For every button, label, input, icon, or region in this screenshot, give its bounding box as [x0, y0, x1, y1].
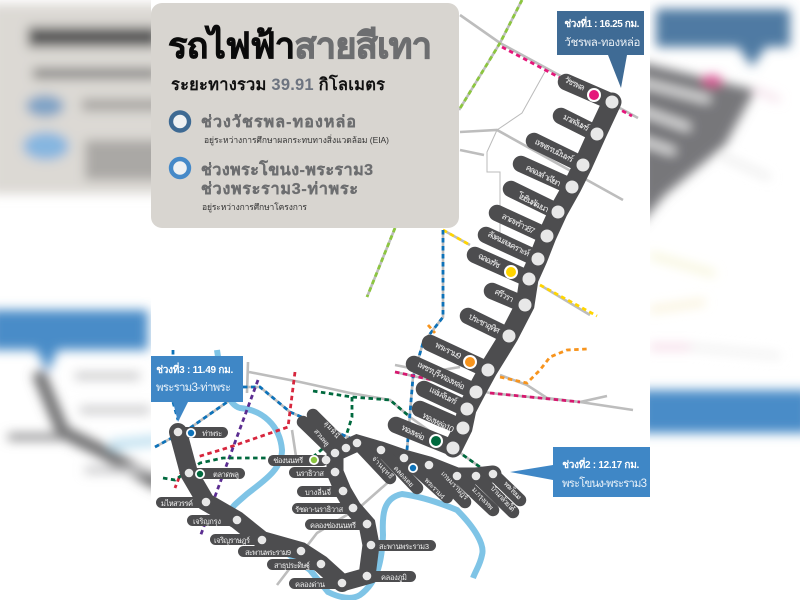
callout: section 1: ช่วงที่1 : 16.25 กม. — [564, 16, 640, 30]
callout: section 3: พระราม3-ท่าพระ — [156, 382, 231, 394]
line section 2: Phra Khanong to Rama 3: เกษมราษฎร์ — [439, 470, 470, 502]
line section 2: Phra Khanong to Rama 3: สวนพลู — [312, 428, 330, 448]
callout: section 3 — [151, 356, 243, 422]
title: รถไฟฟ้าสายสีเทา — [168, 24, 432, 66]
legend: Phra Khanong-Rama 3-Tha Phra: ช่วงพระโขนง-พระราม3 — [201, 159, 373, 179]
line section 1: Watcharaphon to Thonglo: ทองหล่อ10 — [421, 410, 456, 435]
line section 1: Watcharaphon to Thonglo: ฉลองรัช — [476, 250, 503, 270]
line section 3: Rama 3 to Tha Phra: ท่าพระ — [202, 429, 222, 438]
line section 2: Phra Khanong to Rama 3: พระโขนง — [502, 479, 524, 501]
line section 1: Watcharaphon to Thonglo: คลองลำเจียก — [524, 162, 563, 188]
line section 1: Watcharaphon to Thonglo: พระราม9 — [434, 340, 463, 361]
line section 1: Watcharaphon to Thonglo: เพชรบุรี-ทองหล่อ — [415, 359, 467, 392]
total distance: ระยะทางรวม 39.91 กิโลเมตร — [171, 74, 385, 94]
line section 1: Watcharaphon to Thonglo: แจ่มจันทร์ — [428, 384, 459, 407]
line section 3: Rama 3 to Tha Phra: เจริญกรุง — [193, 517, 221, 526]
line section 2: Phra Khanong to Rama 3 — [303, 415, 524, 583]
line section 1: Watcharaphon to Thonglo — [396, 74, 618, 454]
callout: section 2 — [510, 447, 650, 497]
line section 2: Phra Khanong to Rama 3: พระราม4 — [423, 477, 446, 501]
line section 2: Phra Khanong to Rama 3: ม.กรุงเทพ — [470, 486, 494, 512]
legend: Phra Khanong-Rama 3-Tha Phra: อยู่ระหว่างการศึกษาโครงการ — [202, 202, 307, 213]
background transit lines — [155, 0, 638, 585]
line section 3: Rama 3 to Tha Phra: สะพานพระราม9 — [245, 548, 291, 557]
line section 3: Rama 3 to Tha Phra: บางลี่นจี่ — [305, 487, 331, 497]
line section 2: Phra Khanong to Rama 3: จ่านยุทธี — [370, 455, 395, 481]
callout: section 2: ช่วงที่2 : 12.17 กม. — [562, 457, 640, 471]
line section 2: Phra Khanong to Rama 3: คลองเตย — [392, 465, 415, 489]
legend: Phra Khanong-Rama 3-Tha Phra: ช่วงพระราม3-ท่าพระ — [201, 181, 358, 198]
blurred left backdrop — [0, 4, 165, 485]
line section 1: Watcharaphon to Thonglo: ทองหล่อ — [400, 422, 427, 442]
line section 3: Rama 3 to Tha Phra: ช่องนนทรี — [273, 456, 303, 465]
line section 1: Watcharaphon to Thonglo: ศรีวรา — [493, 286, 516, 304]
line section 2: Phra Khanong to Rama 3: บ้านกล้วยใต้ — [489, 484, 518, 514]
line section 1: Watcharaphon to Thonglo: วัชรพล — [563, 74, 587, 93]
callout: section 1: วัชรพล-ทองหล่อ — [564, 37, 640, 49]
line section 3: Rama 3 to Tha Phra: เจริญราษฎร์ — [214, 536, 250, 545]
line section 1: Watcharaphon to Thonglo: ประชาอุทิศ — [466, 311, 502, 337]
callout: section 2: พระโขนง-พระราม3 — [562, 476, 647, 490]
line section 2: Phra Khanong to Rama 3: ลุมพินี — [322, 419, 341, 440]
line section 3: Rama 3 to Tha Phra: คลองภูมิ — [381, 573, 407, 582]
line section 3: Rama 3 to Tha Phra: ตลาดพลู — [213, 470, 239, 479]
line section 3: Rama 3 to Tha Phra: รัชดา-นราธิวาส — [295, 505, 344, 514]
legend: Phra Khanong-Rama 3-Tha Phra — [171, 159, 373, 213]
panel: title and legend — [151, 3, 459, 228]
legend: Watcharaphon-Thonglo: อยู่ระหว่างการศึกษาผลกระทบทางสิ่งแวดล้อม (EIA) — [204, 134, 389, 146]
white centre backing — [151, 0, 650, 600]
rivers — [217, 350, 483, 598]
legend: Watcharaphon-Thonglo — [171, 112, 389, 146]
line section 1: Watcharaphon to Thonglo: ลาดพร้าว87 — [500, 211, 537, 236]
line section 3: Rama 3 to Tha Phra: นราธิวาส — [296, 469, 324, 478]
line section 1: Watcharaphon to Thonglo: มวลจันทร์ — [562, 112, 591, 133]
blurred right backdrop — [640, 9, 800, 433]
callout: section 3: ช่วงที่3 : 11.49 กม. — [156, 362, 233, 376]
line section 3: Rama 3 to Tha Phra: มไหสวรรค์ — [161, 499, 193, 508]
callout: section 1 — [557, 11, 644, 88]
line section 3: Rama 3 to Tha Phra: สาธุประดิษฐ์ — [274, 561, 310, 570]
line section 3: Rama 3 to Tha Phra: คลองช่องนนทรี — [310, 521, 356, 530]
line section 1: Watcharaphon to Thonglo: สังคมสงเคราะห์ — [486, 229, 532, 258]
line section 3: Rama 3 to Tha Phra — [156, 427, 436, 589]
line section 3: Rama 3 to Tha Phra: สะพานพระราม3 — [379, 542, 429, 551]
line section 1: Watcharaphon to Thonglo: เทพธรบมินทร์ — [533, 136, 576, 165]
line section 1: Watcharaphon to Thonglo: โยธินพัฒนา — [516, 190, 551, 214]
legend: Watcharaphon-Thonglo: ช่วงวัชรพล-ทองหล่อ — [201, 113, 356, 131]
line section 3: Rama 3 to Tha Phra: คลองด่าน — [295, 580, 325, 589]
